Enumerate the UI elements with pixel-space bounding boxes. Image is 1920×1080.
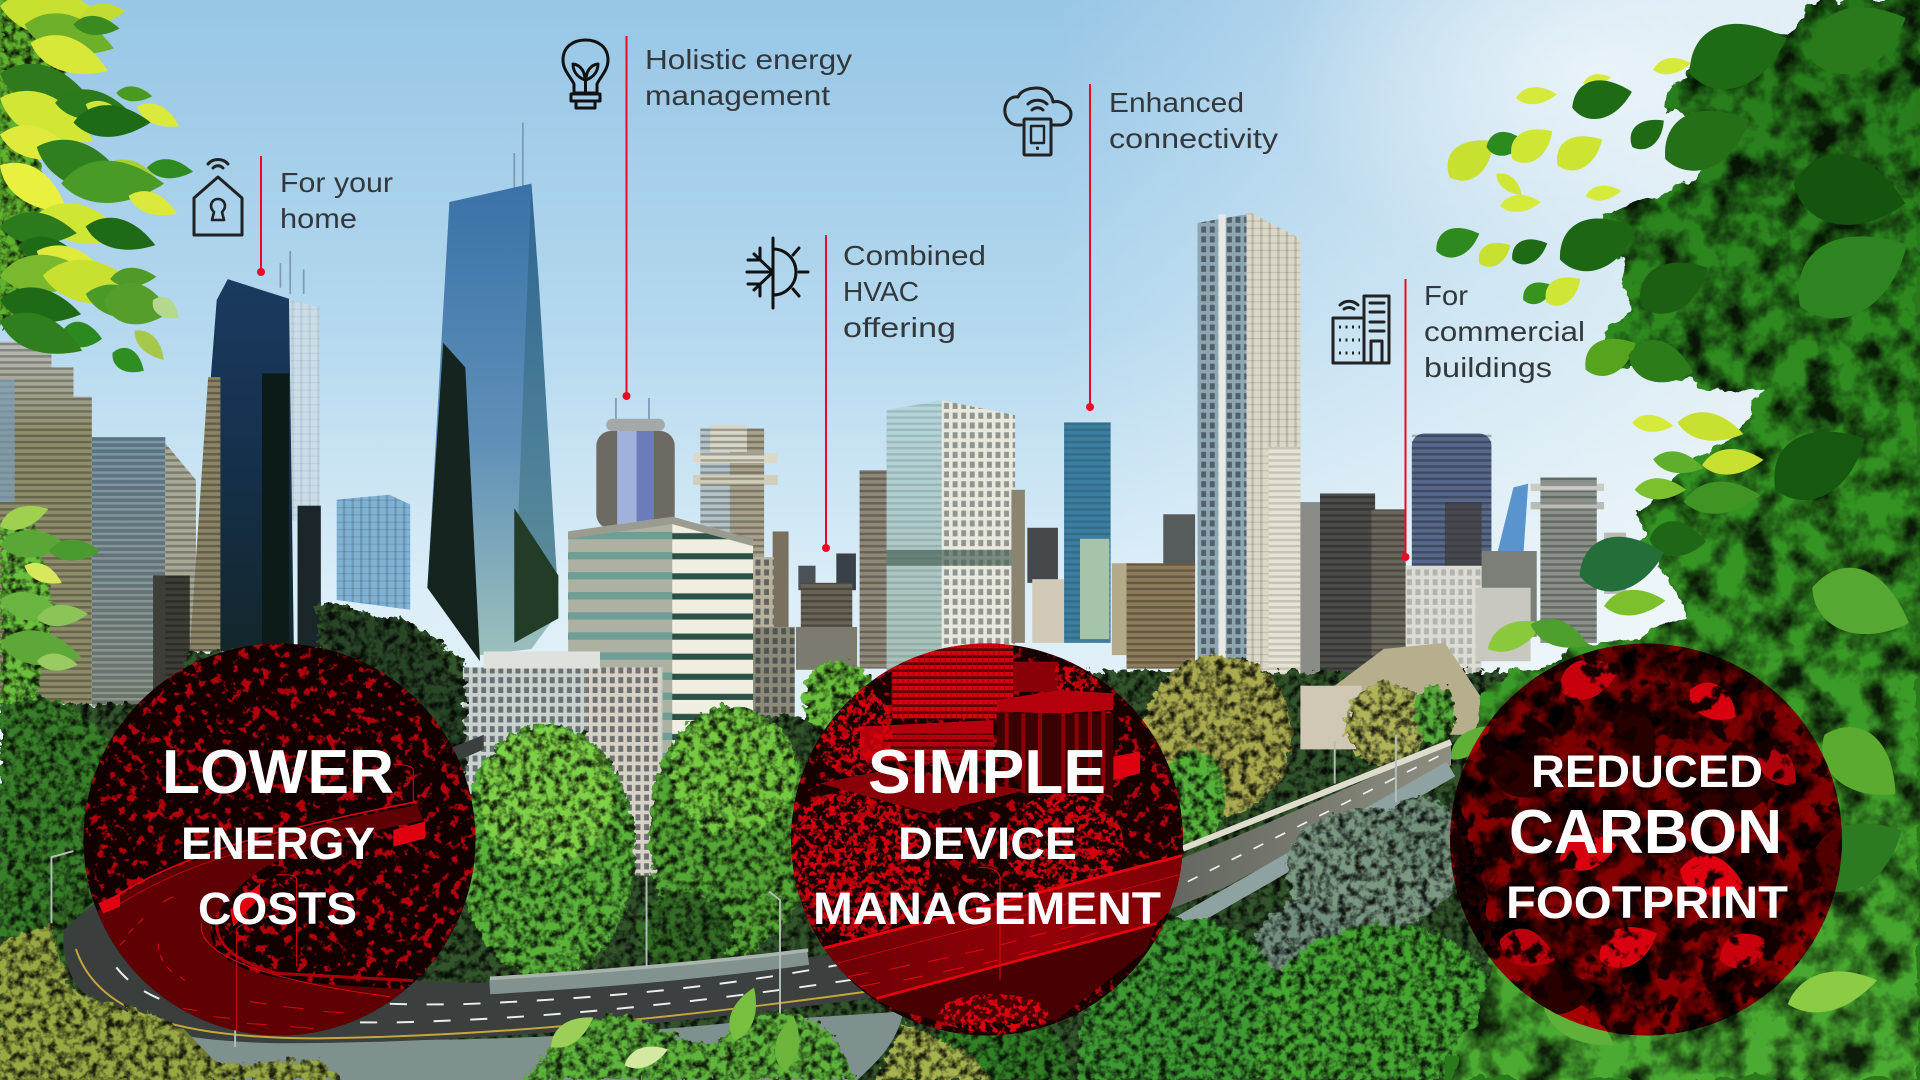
leader line: connectivity	[1086, 84, 1094, 411]
foliage mass left	[0, 0, 67, 331]
large striped office	[568, 517, 753, 765]
grey green trees	[1256, 796, 1457, 980]
bright tree below road	[938, 994, 1048, 1033]
foreground green trees	[924, 918, 1512, 1080]
front white office	[463, 651, 662, 876]
road bright lines	[100, 764, 417, 1050]
text: for your home	[280, 167, 393, 234]
bright signs	[98, 822, 425, 927]
road markings	[76, 753, 1445, 1038]
leaves lower right cluster	[1444, 0, 1920, 1059]
white tower in red	[892, 640, 1013, 718]
leader line: holistic energy	[622, 36, 630, 400]
text: for commercial buildings	[1424, 280, 1585, 383]
text: holistic energy management: Holistic energy	[645, 44, 852, 75]
callout: reduced carbon footprint: REDUCED	[1531, 746, 1763, 797]
ground backing	[0, 784, 1518, 1080]
icon: commercial buildings	[1333, 296, 1389, 363]
back towers centre	[596, 419, 889, 722]
mid skyline towers	[1011, 422, 1195, 669]
olive trees right of centre	[1145, 654, 1455, 847]
callout: lower energy costs: ENERGY	[181, 818, 375, 869]
road rails and dashes	[823, 855, 1185, 998]
trees in bright red	[777, 657, 1123, 937]
text: for your home: For your	[280, 167, 393, 198]
tower antennas	[280, 122, 649, 422]
callout: simple device management	[813, 738, 1161, 934]
leader line: home	[257, 156, 265, 276]
icon: smart home	[194, 160, 242, 235]
leaves lower left	[0, 498, 100, 672]
tall blue glass tower	[427, 184, 558, 661]
red circle left: road and trees in red duotone	[84, 644, 476, 1036]
text: combined hvac offering: HVAC	[843, 276, 919, 307]
roof platform	[820, 770, 1027, 813]
text: for commercial buildings: For	[1424, 280, 1468, 311]
highway wall	[51, 989, 904, 1080]
red circle centre: building and road in red duotone	[791, 644, 1183, 1036]
roof building	[997, 713, 1113, 797]
callout: reduced carbon footprint	[1506, 746, 1788, 928]
bright panel	[1113, 752, 1140, 780]
leaves top left	[0, 0, 194, 380]
callout: reduced carbon footprint: CARBON	[1509, 798, 1782, 867]
text: combined hvac offering: Combined	[843, 240, 986, 271]
red leaf shapes	[1486, 649, 1807, 1019]
rear tree left	[321, 612, 465, 784]
highway road surface	[63, 735, 1451, 1043]
right skyline towers	[1300, 433, 1626, 694]
upper block	[1013, 662, 1058, 692]
text: for commercial buildings: commercial	[1424, 316, 1585, 347]
callout: simple device management: DEVICE	[898, 818, 1077, 869]
foliage edge backing right	[1445, 0, 1920, 1080]
icon: energy bulb	[563, 40, 608, 108]
speckled trees	[84, 644, 476, 1036]
small blue tower	[337, 495, 410, 610]
ground base dark trees	[0, 600, 1518, 1080]
leader line: hvac	[822, 235, 830, 552]
leaves top right	[1431, 6, 1797, 391]
callout: lower energy costs: COSTS	[198, 883, 357, 934]
curved road	[97, 805, 424, 1036]
text: enhanced connectivity: connectivity	[1109, 123, 1278, 154]
callout: lower energy costs	[162, 738, 394, 934]
callout: lower energy costs: LOWER	[162, 738, 394, 807]
text: enhanced connectivity	[1109, 87, 1278, 154]
red circle right: leaves in red duotone	[1450, 644, 1842, 1036]
road in red	[823, 857, 1185, 1000]
foliage mass lower left	[0, 527, 55, 704]
terrace block	[860, 720, 993, 763]
dark glass tower	[190, 279, 321, 651]
white glass tower centre	[887, 400, 1015, 671]
text: for commercial buildings: buildings	[1424, 352, 1552, 383]
road barrier wall	[490, 742, 1451, 987]
speckled trees base	[791, 644, 1183, 1036]
leader line: commercial	[1402, 279, 1410, 561]
beige low buildings	[1300, 643, 1488, 749]
text: combined hvac offering	[843, 240, 986, 343]
icon: hvac sun and snowflake	[747, 238, 808, 308]
callout: simple device management: SIMPLE	[868, 738, 1106, 807]
text: combined hvac offering: offering	[843, 312, 956, 343]
street lamps	[51, 735, 1396, 1047]
text: enhanced connectivity: Enhanced	[1109, 87, 1244, 118]
tallest white tower	[1198, 211, 1300, 818]
icon: cloud and phone	[1005, 88, 1071, 155]
callout: simple device management: MANAGEMENT	[813, 883, 1161, 934]
callout: reduced carbon footprint: FOOTPRINT	[1506, 877, 1788, 928]
far left towers	[0, 342, 196, 707]
sky glow	[1273, 0, 1910, 282]
dark mottling	[1450, 640, 1850, 1040]
foreground bushes	[0, 924, 992, 1080]
text: holistic energy management: management	[645, 80, 830, 111]
text: holistic energy management	[645, 44, 852, 111]
leaves bottom centre	[544, 983, 804, 1073]
foliage mass right	[1445, 0, 1920, 1080]
foliage edge backing left	[0, 0, 20, 324]
text: for your home: home	[280, 203, 357, 234]
tree cluster left	[0, 691, 208, 980]
bright green centre trees	[459, 661, 877, 978]
bush backing	[0, 1029, 233, 1080]
